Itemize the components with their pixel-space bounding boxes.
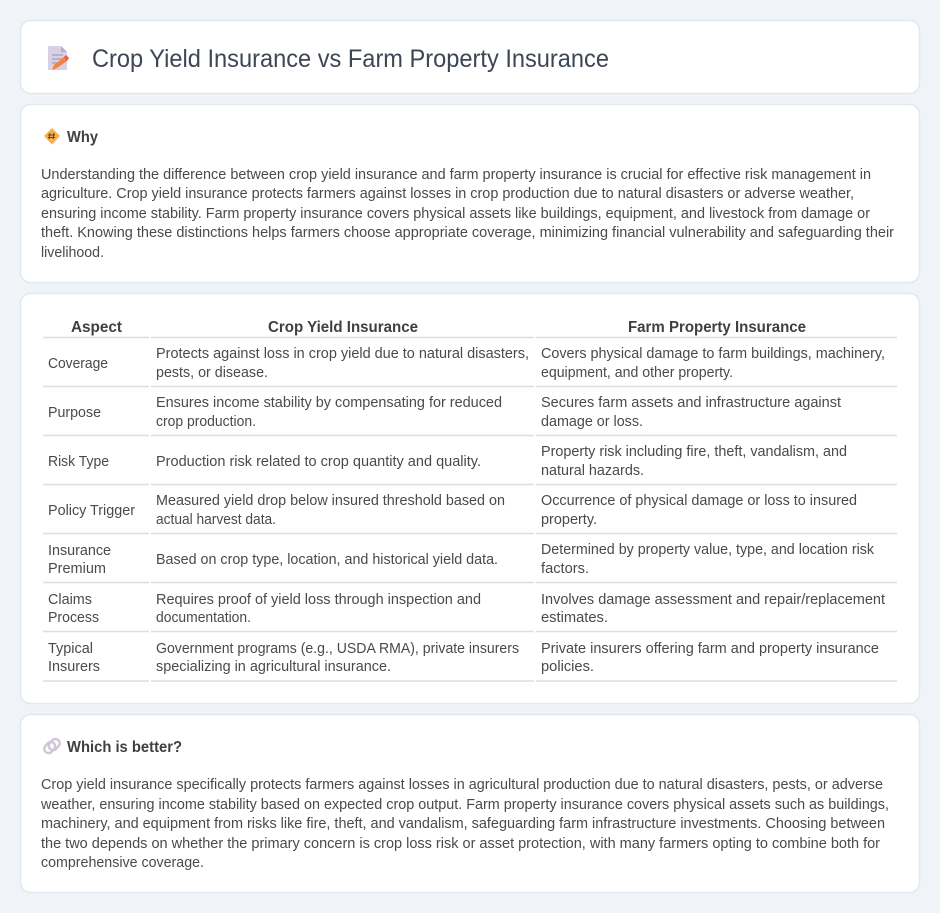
- row: policy trigger: Policy Trigger: [48, 503, 135, 519]
- row: risk type: Property risk including fire, theft, vandalism, and: [541, 444, 847, 460]
- row: policy trigger: [48, 493, 857, 528]
- row: coverage: Protects against loss in crop yield due to natural disasters,: [156, 346, 529, 362]
- title: Crop Yield Insurance vs Farm Property Insurance: [92, 45, 609, 73]
- text block: verdict: comprehensive coverage.: [41, 855, 204, 871]
- text block: verdict: machinery, and equipment from risks like fire, theft, and vandalism, safeguarding farm infrastructure investments. Choosing between: [41, 816, 885, 832]
- panel: header: [20, 20, 920, 94]
- text block: why explanation: Understanding the difference between crop yield insurance and farm property insurance is crucial for effective risk management in: [41, 167, 871, 183]
- row: claims process: documentation.: [156, 610, 251, 626]
- row: policy trigger: actual harvest data.: [156, 512, 276, 528]
- table header row: Aspect: [71, 319, 123, 336]
- row: claims process: Requires proof of yield loss through inspection and: [156, 592, 481, 608]
- row: policy trigger: property.: [541, 512, 597, 528]
- text block: verdict: the two depends on whether the primary concern is crop loss risk or asset protection, with many farmers opting to combine both for: [41, 836, 880, 852]
- row: insurance premium: Insurance: [48, 543, 111, 559]
- row: typical insurers: policies.: [541, 659, 594, 675]
- text block: verdict: weather, ensuring income stability based on expected crop output. Farm property insurance covers physical assets such as buildings,: [40, 797, 889, 813]
- text block: why explanation: agriculture. Crop yield insurance protects farmers against losses in crop production due to natural disasters or adverse weather,: [41, 186, 854, 202]
- heading: why: Why: [67, 129, 98, 146]
- row: risk type: Production risk related to crop quantity and quality.: [156, 454, 481, 470]
- row: policy trigger: Measured yield drop below insured threshold based on: [156, 493, 505, 509]
- row: typical insurers: Typical: [48, 641, 93, 657]
- icon: warning diamond: [44, 128, 60, 144]
- row: policy trigger: Occurrence of physical damage or loss to insured: [541, 493, 857, 509]
- row: insurance premium: Determined by property value, type, and location risk: [541, 542, 875, 558]
- row: purpose: crop production.: [156, 414, 256, 430]
- row: typical insurers: Insurers: [48, 659, 100, 675]
- row: claims process: Claims: [48, 592, 92, 608]
- row: insurance premium: Based on crop type, location, and historical yield data.: [156, 552, 498, 568]
- text block: why explanation: livelihood.: [41, 245, 104, 261]
- row: purpose: Secures farm assets and infrastructure against: [541, 395, 841, 411]
- row: risk type: natural hazards.: [541, 463, 644, 479]
- row: typical insurers: [48, 641, 879, 675]
- table header row: Farm Property Insurance: [628, 319, 806, 336]
- row: purpose: Ensures income stability by compensating for reduced: [156, 395, 502, 411]
- row: insurance premium: factors.: [541, 561, 589, 577]
- text block: why explanation: [41, 167, 894, 261]
- row: purpose: damage or loss.: [541, 414, 643, 430]
- row: claims process: [48, 592, 885, 626]
- table header row: Crop Yield Insurance: [268, 319, 418, 336]
- row: coverage: Covers physical damage to farm buildings, machinery,: [541, 346, 885, 362]
- panel: comparison table: [20, 294, 920, 704]
- text block: why explanation: ensuring income stability. Farm property insurance covers physical assets like buildings, equipment, and livestock from damage or: [41, 206, 870, 222]
- row: claims process: estimates.: [541, 610, 608, 626]
- icon: chain link: [43, 737, 61, 755]
- text block: verdict: Crop yield insurance specifically protects farmers against losses in agricultural production due to natural disasters, pests, or adverse: [41, 777, 883, 793]
- row: insurance premium: Premium: [48, 561, 106, 577]
- row: coverage: pests, or disease.: [156, 365, 268, 381]
- text block: why explanation: theft. Knowing these distinctions helps farmers choose appropriate coverage, minimizing financial vulnerability and safeguarding their: [41, 225, 894, 241]
- row: purpose: Purpose: [48, 405, 101, 421]
- row: typical insurers: Government programs (e.g., USDA RMA), private insurers: [156, 641, 519, 657]
- text block: verdict: [40, 777, 889, 871]
- row: coverage: Coverage: [48, 356, 108, 372]
- row: risk type: [48, 444, 847, 479]
- table header row: [71, 319, 806, 336]
- row: claims process: Process: [48, 610, 99, 626]
- icon: document with pencil: [48, 46, 69, 70]
- row: purpose: [48, 395, 841, 430]
- row: claims process: Involves damage assessment and repair/replacement: [541, 592, 885, 608]
- row: insurance premium: [48, 542, 875, 577]
- panel: which is better: [20, 714, 920, 892]
- row: coverage: [48, 346, 885, 381]
- panel: why: [20, 104, 920, 282]
- row: typical insurers: Private insurers offering farm and property insurance: [541, 641, 879, 657]
- row: typical insurers: specializing in agricultural insurance.: [156, 659, 391, 675]
- row: risk type: Risk Type: [48, 454, 109, 470]
- row: coverage: equipment, and other property.: [541, 365, 733, 381]
- heading: which is better: Which is better?: [67, 739, 182, 756]
